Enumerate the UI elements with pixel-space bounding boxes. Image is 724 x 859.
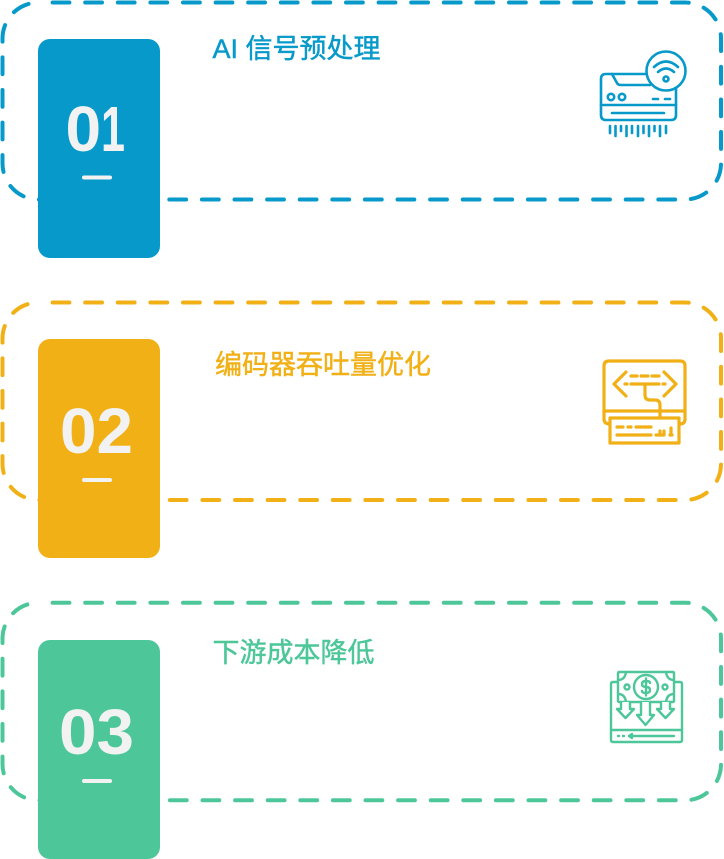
icon: wifi air conditioner (601, 52, 686, 136)
number card 02: 02 (60, 395, 133, 467)
panel: step 01 (2, 2, 721, 258)
panel: step 02 (2, 302, 721, 558)
number card 03: 03 (59, 696, 134, 768)
heading 03: 下游成本降低 (212, 638, 374, 668)
number card 01: 1 (101, 93, 125, 165)
number card 03 (38, 640, 160, 859)
dashed frame 03 (2, 603, 721, 800)
icon: money savings (611, 672, 682, 742)
number card 01 (38, 39, 160, 258)
icon: code screen and keyboard (604, 361, 685, 443)
heading 01: AI 信号预处理 (212, 34, 381, 64)
panel: step 03 (2, 603, 721, 859)
heading 02: 编码器吞吐量优化 (215, 350, 431, 380)
dashed frame 02 (2, 302, 721, 500)
number card 01: 0 (66, 93, 101, 165)
dashed frame 01 (2, 2, 721, 200)
number card 02 (38, 339, 160, 558)
